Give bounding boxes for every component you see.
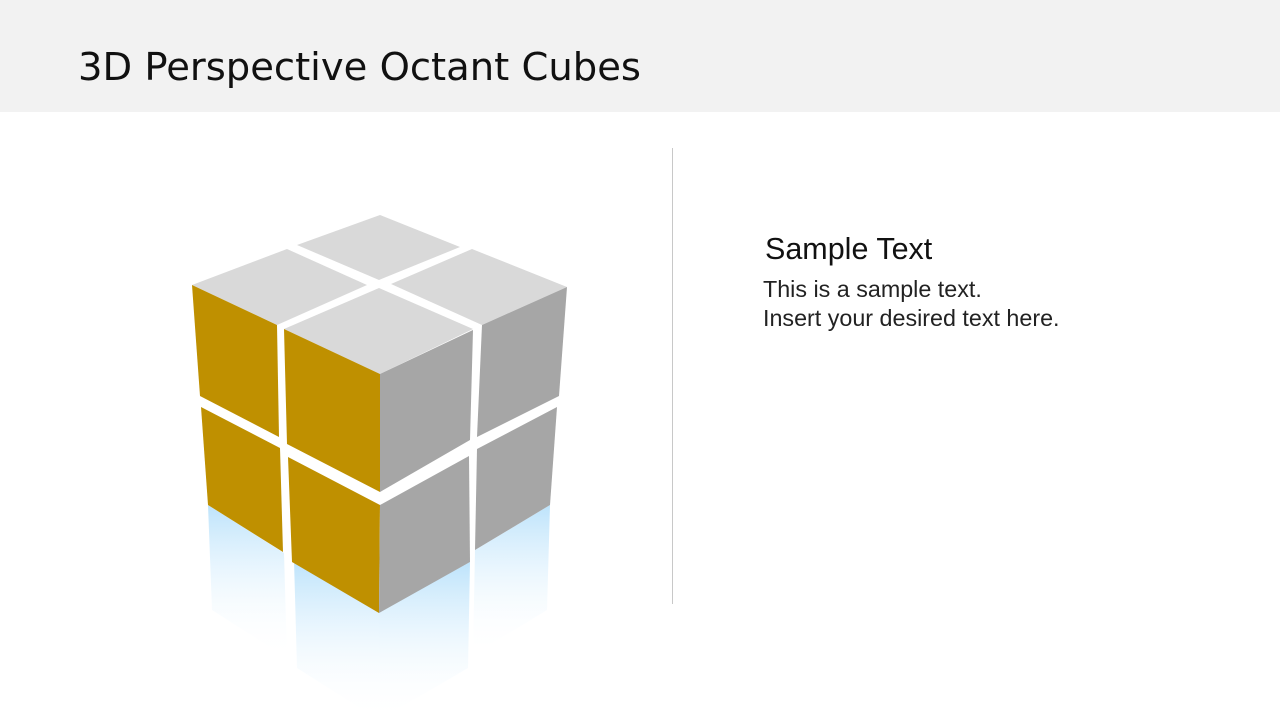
gold faces: [192, 285, 380, 613]
title: 3D Perspective Octant Cubes: [78, 45, 641, 90]
reflection: [208, 505, 550, 720]
cube graphic: [192, 215, 567, 664]
header band: [0, 0, 1280, 112]
text block body: [763, 276, 1060, 331]
divider: [672, 148, 673, 604]
top faces: [192, 215, 567, 374]
text block body: This is a sample text.: [763, 276, 982, 302]
gray faces: [379, 287, 567, 613]
text block heading: Sample Text: [765, 232, 932, 266]
text block body: Insert your desired text here.: [763, 305, 1060, 331]
